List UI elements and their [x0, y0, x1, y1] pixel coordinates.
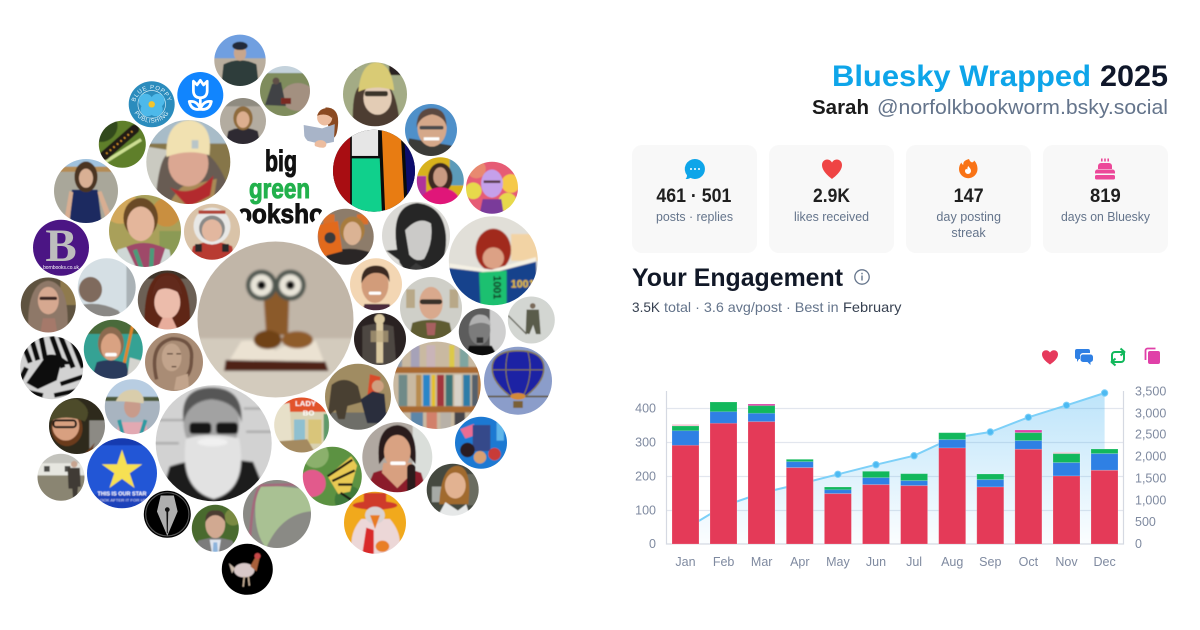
avatar: blue panel with yellow star: LOOK AFTER IT FOR US — [98, 498, 147, 502]
user name and handle: @norfolkbookworm.bsky.social — [877, 97, 1168, 119]
panel: day posting streak: streak — [951, 225, 986, 240]
avatar: blue panel with yellow star — [80, 431, 164, 515]
month labels: Sep — [979, 555, 1001, 569]
avatar: woman with bronze boar statue — [325, 364, 391, 430]
avatar: woman reading 1001 Books — [448, 216, 538, 306]
avatar: distant man by house — [33, 449, 89, 506]
avatar: smiling man with glasses — [405, 104, 457, 156]
chart: monthly engagement stacked bars with cumulative line — [635, 384, 1166, 569]
panel: days on Bluesky: days on Bluesky — [1061, 209, 1150, 224]
avatar: big green bookshop logo: green — [249, 173, 310, 204]
avatar: blue panel with yellow star: THIS IS OUR STAR — [97, 492, 147, 498]
panel: day posting streak: day posting — [936, 209, 1001, 224]
month labels: Apr — [790, 555, 810, 569]
month labels: Mar — [751, 555, 772, 569]
avatar: woman with orange books — [318, 208, 374, 265]
left axis labels: 300 — [635, 436, 656, 450]
bar: Nov — [1053, 452, 1080, 544]
avatar: girl on beach in navy dress — [54, 159, 118, 223]
avatar: woman in green hat and glasses — [43, 392, 111, 460]
month labels: Aug — [941, 555, 963, 569]
avatar: person in the snow — [508, 296, 555, 344]
avatar: luna moth wing — [236, 473, 318, 555]
month labels: May — [826, 555, 850, 569]
panel: avatar bubble cluster — [20, 34, 555, 595]
engagement summary: 3.5K — [632, 299, 661, 315]
avatar: man in suit — [187, 500, 244, 556]
avatar: woman in cap by water — [99, 374, 165, 440]
bar: Sep — [977, 474, 1004, 544]
avatar: bald man with round glasses — [400, 277, 462, 339]
avatar: woman in pink scarf — [416, 157, 464, 204]
icon: flame — [959, 159, 978, 178]
avatar: sepia sketch of woman — [139, 327, 209, 397]
chart legend icons — [1042, 348, 1160, 366]
avatar: fountain pen nib — [139, 486, 196, 542]
avatar: illustrated reading girl — [304, 107, 338, 148]
icon: legend repost — [1112, 348, 1124, 366]
panel: posts and replies: posts · replies — [656, 209, 733, 224]
avatar: chicken on black — [217, 539, 278, 600]
left axis labels: 400 — [635, 402, 656, 416]
panel: likes received — [769, 145, 894, 253]
avatar: stained glass window — [333, 130, 415, 212]
icon: legend comments — [1075, 349, 1093, 365]
heading: Your Engagement: Your Engagement — [632, 264, 844, 292]
avatar: yellow swallowtail butterfly — [302, 446, 362, 506]
icon: legend quote copy — [1146, 348, 1160, 364]
avatar: purple B logo: bornbooks.co.uk — [43, 265, 79, 271]
avatar: smiling woman by teal water — [78, 314, 149, 385]
avatar: big green bookshop logo: big — [265, 145, 297, 178]
avatar: bearded man with glasses — [144, 374, 283, 513]
avatar: woman reading 1001 Books: 1001 — [490, 276, 502, 299]
avatar: Blue Poppy Publishing logo: BLUE POPPY — [131, 84, 172, 102]
right axis labels: 500 — [1135, 515, 1156, 529]
bar: May — [824, 487, 851, 544]
panel: likes received: 2.9K — [813, 186, 850, 207]
area under cumulative line — [686, 393, 1105, 544]
month labels: Oct — [1019, 555, 1039, 569]
avatar: Ladybird books: LADY — [295, 399, 316, 408]
engagement summary: February — [843, 299, 901, 315]
icon: info — [855, 270, 869, 284]
right axis labels: 2,500 — [1135, 428, 1166, 442]
panel: posts and replies — [632, 145, 757, 253]
bar: Mar — [748, 404, 775, 544]
month labels: Jun — [866, 555, 886, 569]
avatar: person by window — [78, 258, 136, 316]
bar: Jan — [672, 424, 699, 544]
right axis labels: 2,000 — [1135, 450, 1166, 464]
right axis labels: 1,000 — [1135, 494, 1166, 508]
month labels: Feb — [713, 555, 734, 569]
avatar: woman in striped top — [220, 98, 266, 144]
right axis labels: 3,000 — [1135, 406, 1166, 420]
engagement summary — [632, 299, 901, 315]
avatar: woman with braid — [362, 422, 432, 492]
avatar: purple B logo — [33, 220, 89, 276]
avatar: woman in yellow knitted hat — [343, 62, 407, 126]
left axis labels: 0 — [649, 537, 656, 551]
bar: Jun — [862, 471, 890, 544]
avatar: big green bookshop logo — [240, 149, 322, 224]
avatar: skeleton in jacket — [354, 313, 406, 365]
panel: posts and replies: 461 · 501 — [656, 186, 732, 207]
month labels: Jan — [675, 555, 696, 569]
engagement summary: total · 3.6 avg/post · Best in — [664, 299, 839, 315]
bar: Dec — [1091, 449, 1118, 544]
title: Bluesky Wrapped — [832, 60, 1091, 93]
avatar: big worm with glasses on book — [198, 242, 354, 398]
avatar: black and white older man — [458, 308, 506, 356]
avatar: Ladybird books: BO — [303, 409, 314, 418]
avatar: smiling man, peach background — [350, 258, 402, 310]
avatar: stained glass hot air balloon — [484, 346, 552, 415]
avatar: blonde woman smiling — [426, 464, 479, 516]
avatar: woman with colourful scarf — [109, 195, 181, 267]
month labels — [675, 555, 1116, 569]
icon: chat bubble — [685, 159, 705, 179]
avatar: psychedelic portrait — [466, 162, 518, 214]
avatar: Ladybird books — [274, 398, 330, 452]
avatar: woman with grey hair and glasses — [20, 278, 76, 332]
left axis labels — [635, 402, 656, 551]
avatar: colourful display — [455, 416, 507, 469]
avatar: caterpillar on grass — [98, 120, 146, 168]
bar: Apr — [786, 459, 813, 544]
avatar: woman with auburn fringe — [138, 270, 197, 330]
month labels: Dec — [1093, 555, 1116, 569]
avatar: purple B logo: B — [45, 220, 77, 272]
cumulative line with markers — [686, 390, 1108, 529]
avatar: bookshelf — [393, 342, 481, 429]
avatar: womble in red hat — [344, 492, 406, 554]
month labels: Nov — [1055, 555, 1078, 569]
bar: Feb — [710, 402, 737, 544]
panel: day posting streak — [906, 145, 1031, 253]
panel: days on Bluesky — [1043, 145, 1168, 253]
avatar: black and white woman — [382, 202, 450, 270]
avatar: big green bookshop logo: bookshop — [222, 199, 339, 229]
avatar: crow woodcut — [14, 330, 90, 406]
panel: days on Bluesky: 819 — [1090, 186, 1121, 207]
right axis labels: 3,500 — [1135, 384, 1166, 398]
icon: heart — [822, 160, 842, 179]
user name and handle: Sarah — [812, 97, 869, 119]
icon: birthday cake — [1095, 158, 1115, 180]
avatar: woman reading 1001 Books: 1001 — [511, 278, 535, 290]
avatar: man in cap on beach — [214, 34, 266, 86]
avatar: Blue Poppy Publishing logo — [128, 81, 175, 128]
avatar: Blue Poppy Publishing logo: PUBLISHING — [134, 110, 168, 123]
left axis labels: 200 — [635, 470, 656, 484]
right axis labels: 0 — [1135, 537, 1142, 551]
stacked bars — [672, 402, 1118, 544]
avatar: woman in cream beanie — [146, 120, 230, 204]
right axis labels: 1,500 — [1135, 472, 1166, 486]
icon: legend heart — [1042, 350, 1058, 364]
month labels: Jul — [906, 555, 922, 569]
bar: Jul — [901, 474, 928, 544]
avatar: astronaut portrait — [184, 204, 240, 260]
avatar: tulip logo — [177, 72, 224, 118]
bar: Oct — [1015, 430, 1042, 544]
avatar: person crouching in field — [260, 66, 310, 116]
panel: day posting streak: 147 — [954, 186, 984, 207]
right axis labels — [1135, 384, 1166, 551]
panel: likes received: likes received — [794, 209, 869, 224]
left axis labels: 100 — [635, 504, 656, 518]
title: 2025 — [1100, 60, 1168, 93]
bar: Aug — [939, 433, 966, 544]
